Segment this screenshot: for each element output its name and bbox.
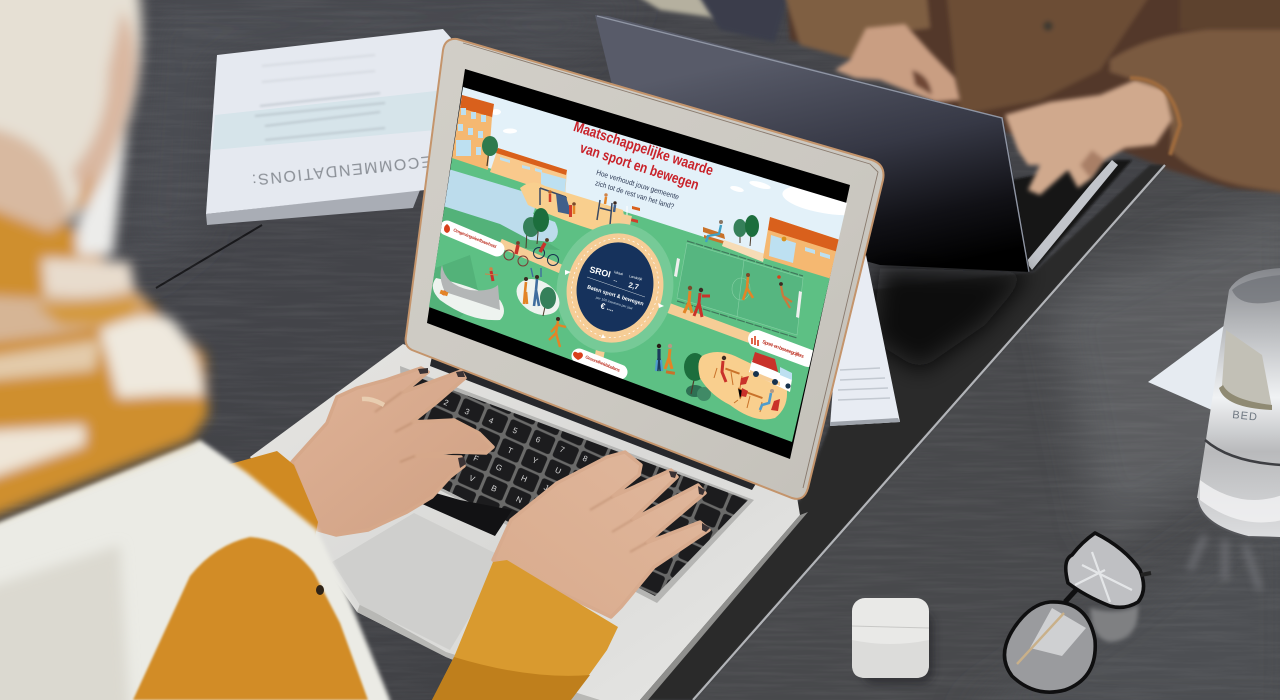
runner — [549, 317, 566, 347]
keyboard: G — [494, 462, 504, 473]
document: recommendations booklet: RECOMMENDATIONS: — [250, 151, 445, 188]
woman's headscarf — [0, 0, 208, 525]
keyboard: 4 — [487, 416, 495, 426]
paper under the water glass — [1148, 325, 1230, 418]
green ground — [435, 156, 830, 442]
keyboard: F — [472, 454, 480, 464]
eyeglasses — [1004, 533, 1151, 692]
paper under the front laptop — [830, 255, 900, 426]
woman's right hand — [493, 452, 710, 617]
keyboard: U — [554, 465, 563, 476]
subtitle: Hoe verhoudt jouw gemeente — [595, 168, 680, 201]
title: Maatschappelijke waarde — [571, 119, 715, 179]
hinge — [430, 356, 757, 490]
playground sand — [520, 184, 624, 230]
keyboard — [400, 366, 754, 603]
title: van sport en bewegen — [578, 140, 701, 194]
document: recommendations booklet — [206, 29, 451, 225]
far person's left hand — [835, 24, 960, 102]
dark green slopes — [429, 255, 478, 318]
woman's left hand — [292, 368, 493, 535]
keyboard: Y — [531, 456, 540, 466]
front laptop lid — [406, 39, 884, 499]
earbuds case — [852, 598, 934, 684]
players — [684, 273, 792, 317]
keyboard: 7 — [558, 445, 566, 455]
person across the table: brown shirt — [780, 0, 1280, 195]
clouds — [492, 109, 847, 216]
food truck — [749, 352, 792, 392]
label: gezondheid: Gezondheidsbalans — [585, 354, 621, 373]
keyboard: J — [542, 483, 550, 493]
SROI score panel: per 100 inwoners per jaar — [595, 296, 634, 311]
label: omgevings index: Omgevingsleefbaarheid — [453, 227, 497, 249]
ring — [362, 399, 384, 405]
skate ramp — [433, 265, 504, 320]
keyboard: T — [506, 446, 514, 456]
keyboard: V — [468, 474, 477, 484]
trackpad — [332, 513, 505, 650]
sports field — [674, 241, 803, 338]
far person's bracelet — [1130, 78, 1180, 155]
front laptop base — [250, 344, 808, 700]
far laptop: dark lid and silver base — [595, 15, 1165, 700]
keyboard: 8 — [581, 454, 589, 464]
SROI score panel: 2,7 — [627, 280, 640, 292]
keyboard: N — [515, 494, 524, 505]
label: sport en beweegcijfers: Sport- en beweegcijfers — [761, 339, 805, 360]
keyboard: H — [520, 473, 529, 484]
SROI score panel: € — [599, 301, 607, 311]
nail art — [418, 368, 466, 468]
terrace sand blob — [698, 352, 787, 419]
cyclists — [504, 238, 558, 266]
woman's orange top — [133, 537, 368, 700]
woman's white vest — [0, 440, 390, 700]
woman's right sleeve — [432, 560, 618, 700]
black screen bands — [427, 69, 850, 459]
SROI score panel — [576, 242, 654, 332]
park bench with person — [703, 220, 725, 244]
water glass: BED — [1232, 409, 1258, 424]
trees near right building — [734, 215, 759, 246]
keyboard: B — [490, 484, 498, 494]
playground equipment — [539, 187, 640, 224]
road arrows — [565, 270, 664, 338]
water glass — [1197, 268, 1280, 538]
roundabout halo — [556, 223, 674, 352]
keyboard: 5 — [511, 426, 519, 436]
glasses shadow — [1090, 605, 1138, 642]
roundabout ring — [566, 233, 664, 343]
label: sport en beweegcijfers — [752, 336, 808, 360]
couple walking dog — [656, 344, 675, 375]
far person's right hand — [1005, 80, 1172, 195]
SROI score panel: lokaal — [614, 270, 624, 276]
right sports building — [763, 217, 840, 280]
label: gezondheid — [573, 352, 621, 373]
trees by the water — [523, 208, 549, 248]
SROI score panel: Landelijk — [629, 274, 643, 282]
SROI score panel: -- — [612, 278, 618, 285]
low school building — [490, 148, 567, 197]
keyboard: 3 — [463, 407, 471, 417]
subtitle: zich tot de rest van het land? — [594, 178, 675, 211]
keyboard: 2 — [442, 398, 450, 408]
glass light reflections on table — [1190, 535, 1260, 590]
left apartment building — [452, 95, 494, 170]
woman's left sleeve — [223, 451, 318, 538]
top edge objects behind the far laptop — [628, 0, 790, 42]
sand path by right building — [722, 240, 765, 262]
people exercising in white park blob — [516, 268, 560, 316]
water — [443, 168, 558, 242]
on-screen infographic — [429, 87, 847, 442]
sky — [452, 87, 844, 254]
nail art — [669, 471, 710, 532]
SROI score panel: SROI — [588, 264, 612, 280]
keyboard: 6 — [534, 435, 542, 445]
SROI score panel: Baten sport & bewegen — [586, 285, 644, 308]
roads — [500, 215, 750, 358]
terrace tables with people — [714, 356, 780, 412]
tree — [482, 136, 498, 166]
bottom park trees and shrubs — [684, 353, 711, 401]
